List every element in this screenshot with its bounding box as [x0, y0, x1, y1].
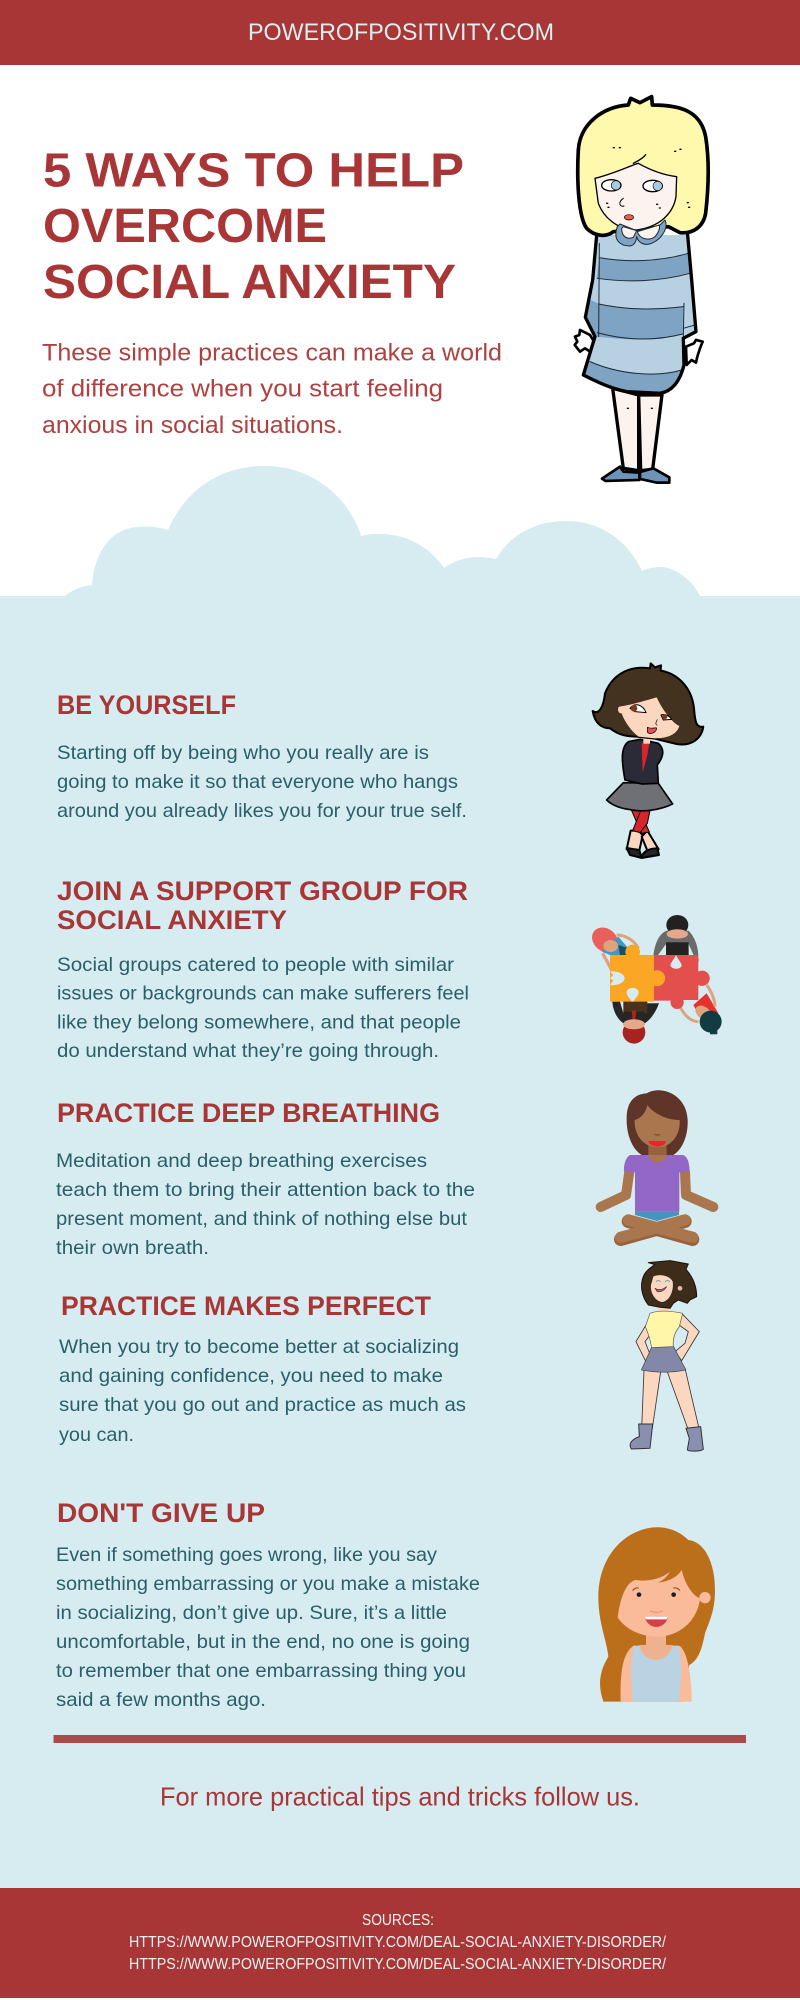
title: OVERCOME	[43, 200, 327, 253]
subtitle	[42, 340, 502, 439]
body: practice makes perfect	[59, 1336, 466, 1446]
heading: support group	[57, 876, 468, 935]
body: be yourself	[57, 742, 467, 822]
heading: be yourself: BE YOURSELF	[57, 690, 236, 720]
footer band with sources	[0, 1888, 800, 1998]
illustration: brunette girl in jacket	[593, 663, 703, 858]
tip 3: deep breathing	[56, 1098, 475, 1259]
body: practice makes perfect: sure that you go out and practice as much as	[59, 1394, 466, 1416]
tip 5: don't give up	[56, 1498, 480, 1711]
title	[43, 144, 464, 309]
subtitle: anxious in social situations.	[42, 412, 343, 439]
body: don't give up: said a few months ago.	[56, 1689, 266, 1711]
heading: deep breathing: PRACTICE DEEP BREATHING	[57, 1098, 440, 1128]
illustration: anxious blonde girl	[575, 97, 708, 483]
header site name: POWEROFPOSITIVITY.COM	[248, 19, 554, 46]
body: deep breathing: Meditation and deep breathing exercises	[56, 1150, 427, 1172]
body: don't give up: in socializing, don’t give up. Sure, it’s a little	[56, 1602, 447, 1624]
subtitle: These simple practices can make a world	[42, 340, 502, 366]
header band	[0, 0, 800, 65]
body: be yourself: around you already likes you for your true self.	[57, 800, 467, 822]
body: deep breathing: their own breath.	[56, 1237, 209, 1259]
sources text: SOURCES:	[362, 1912, 434, 1929]
body: practice makes perfect: and gaining confidence, you need to make	[59, 1365, 443, 1387]
divider bar	[54, 1735, 746, 1743]
body: don't give up: uncomfortable, but in the end, no one is going	[56, 1631, 470, 1653]
heading: don't give up: DON'T GIVE UP	[57, 1498, 265, 1528]
puzzle piece: orange	[610, 945, 665, 1002]
body: be yourself: going to make it so that everyone who hangs	[57, 771, 458, 793]
cloud and pale blue panel	[0, 466, 800, 1998]
body: deep breathing: present moment, and think of nothing else but	[56, 1208, 468, 1230]
illustration: confident woman with hands on hips	[630, 1261, 703, 1451]
body: don't give up: to remember that one embarrassing thing you	[56, 1660, 466, 1682]
title: SOCIAL ANXIETY	[43, 256, 456, 309]
body: support group: issues or backgrounds can make sufferers feel	[57, 982, 469, 1004]
heading: support group: JOIN A SUPPORT GROUP FOR	[57, 876, 468, 906]
body: don't give up: something embarrassing or you make a mistake	[56, 1573, 480, 1595]
illustration: smiling red-haired woman	[598, 1527, 715, 1702]
body: support group: like they belong somewhere, and that people	[57, 1012, 461, 1034]
body: support group: Social groups catered to people with similar	[57, 954, 455, 976]
illustration: people with puzzle pieces	[587, 915, 722, 1044]
illustration: meditating woman	[601, 1090, 713, 1239]
body: don't give up	[56, 1544, 480, 1711]
sources text: HTTPS://WWW.POWEROFPOSITIVITY.COM/DEAL-SOCIAL-ANXIETY-DISORDER/	[129, 1934, 666, 1951]
heading: support group: SOCIAL ANXIETY	[57, 905, 287, 935]
closing call to action: For more practical tips and tricks follow us.	[160, 1782, 640, 1812]
tip 4: practice makes perfect	[59, 1291, 466, 1446]
sources text	[129, 1912, 666, 1973]
tip 2: support group	[57, 876, 469, 1062]
body: practice makes perfect: When you try to become better at socializing	[59, 1336, 459, 1358]
body: support group	[57, 954, 469, 1062]
sources text: HTTPS://WWW.POWEROFPOSITIVITY.COM/DEAL-SOCIAL-ANXIETY-DISORDER/	[129, 1956, 666, 1973]
tip 1: be yourself	[57, 690, 467, 822]
body: practice makes perfect: you can.	[59, 1424, 134, 1446]
subtitle: of difference when you start feeling	[42, 376, 443, 402]
body: support group: do understand what they’re going through.	[57, 1040, 439, 1062]
title: 5 WAYS TO HELP	[43, 144, 464, 198]
body: be yourself: Starting off by being who you really are is	[57, 742, 429, 764]
body: deep breathing	[56, 1150, 475, 1259]
body: don't give up: Even if something goes wrong, like you say	[56, 1544, 437, 1566]
puzzle piece: red	[654, 955, 710, 1009]
body: deep breathing: teach them to bring their attention back to the	[56, 1179, 475, 1201]
heading: practice makes perfect: PRACTICE MAKES PERFECT	[61, 1291, 431, 1321]
